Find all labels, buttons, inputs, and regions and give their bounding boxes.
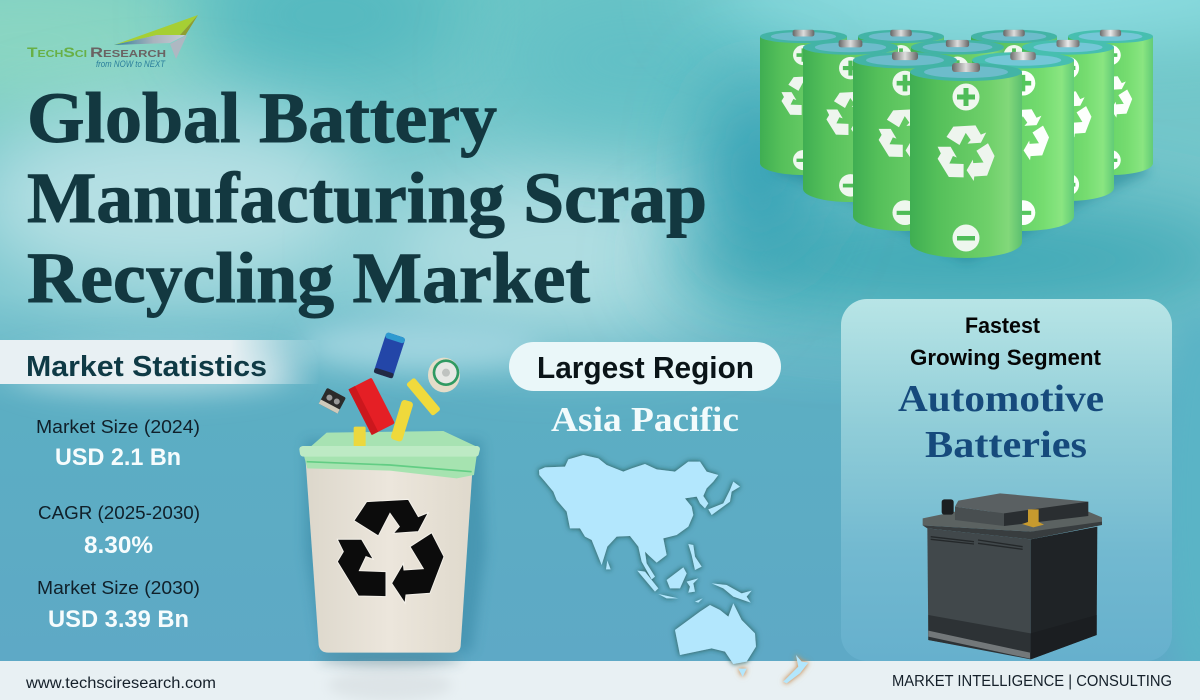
title: Global Battery [27,78,497,158]
segment heading [910,313,1102,370]
image: automotive battery [923,493,1102,659]
logo: Research [90,44,166,60]
logo [27,15,198,69]
largest region pill: Largest Region [537,350,754,385]
image: green recyclable batteries [760,30,1153,262]
stat: market size 2030: USD 3.39 Bn [48,606,189,633]
segment name: Automotive Batteries [898,378,1104,466]
region name: Asia Pacific [551,400,739,439]
footer bar [0,661,1200,700]
logo mark [114,15,198,59]
segment heading: Fastest [965,313,1041,338]
title [27,78,707,318]
stat: CAGR: 8.30% [84,532,153,559]
bin body [305,457,473,653]
segment heading: Growing Segment [910,345,1102,370]
bin rim [299,446,480,457]
panel: fastest growing segment [841,299,1172,661]
largest region pill [509,342,781,391]
market statistics heading: Market Statistics [26,351,267,383]
segment name: Automotive Batteries: Batteries [925,424,1087,466]
map: Asia Pacific [539,455,808,683]
stat: CAGR [38,502,200,559]
falling batteries [319,332,460,448]
stat: market size 2030: Market Size (2030) [37,577,200,598]
footer website: www.techsciresearch.com [25,675,216,692]
segment name: Automotive Batteries: Automotive [898,378,1104,420]
stat: market size 2030 [37,577,200,633]
title: Manufacturing Scrap [27,158,707,238]
bin liner [304,456,477,478]
stat: market size 2024: Market Size (2024) [36,416,200,437]
logo tagline: from NOW to NEXT [96,59,166,69]
footer tagline: MARKET INTELLIGENCE | CONSULTING [892,673,1172,690]
title: Recycling Market [27,238,590,318]
logo wordmark: TechSci [27,44,87,60]
stat: market size 2024: USD 2.1 Bn [55,444,181,471]
stat: CAGR: CAGR (2025-2030) [38,502,200,523]
recycling symbol [337,499,444,603]
market statistics band [0,340,320,384]
stat: market size 2024 [36,416,200,471]
image: recycling bin with batteries [299,332,486,700]
